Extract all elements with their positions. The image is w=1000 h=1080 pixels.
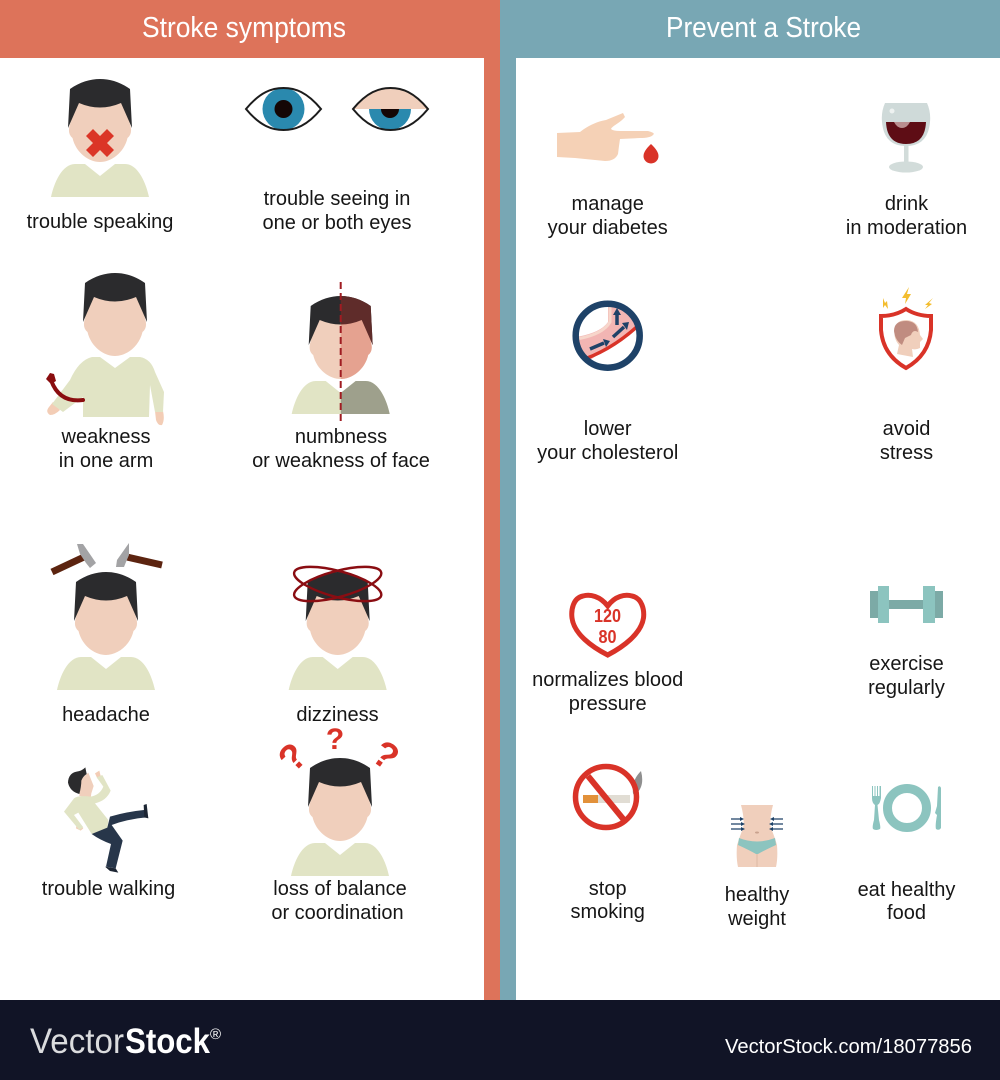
icon: question marks: ? (365, 732, 407, 779)
tip: drink in moderation: in moderation (846, 217, 967, 239)
tip: exercise regularly: exercise (869, 653, 944, 675)
icon: wine glass (882, 103, 930, 172)
tip: manage diabetes (548, 113, 668, 239)
heading: stroke symptoms: Stroke symptoms (142, 12, 346, 44)
symptom: weakness in one arm: weakness (61, 426, 150, 448)
symptom: trouble speaking (27, 79, 173, 233)
tip: avoid stress (880, 287, 933, 464)
panel: prevent a stroke (500, 0, 1000, 1000)
tip: eat healthy food: eat healthy (858, 879, 955, 901)
tip: drink in moderation (846, 103, 967, 239)
tip: healthy weight: healthy (725, 884, 789, 906)
icon: right hammer (116, 543, 162, 567)
tip: lower cholesterol: lower (584, 418, 632, 440)
footer band (0, 1000, 1000, 1080)
symptom: loss of balance: loss of balance (273, 878, 407, 900)
icon: heart with reading: 80 (598, 627, 616, 647)
logo: VectorStock: ® (210, 1026, 221, 1043)
tip: lower cholesterol (537, 300, 678, 464)
tip: normalize blood pressure (532, 595, 683, 715)
icon: dumbbell (870, 586, 943, 623)
icon: red cross over mouth (86, 129, 114, 157)
icon: drooping eye (352, 87, 430, 131)
dashed midline (340, 282, 342, 425)
symptom: trouble walking (42, 767, 175, 900)
tip: normalize blood pressure: normalizes blood (532, 669, 683, 691)
tip: exercise regularly (868, 586, 945, 699)
tip: healthy weight: weight (727, 908, 786, 930)
symptom: numbness of face: numbness (295, 426, 387, 448)
icon: open eye (246, 88, 321, 130)
tip: manage diabetes: your diabetes (548, 217, 668, 239)
symptom: trouble seeing (246, 80, 430, 234)
icon: spinning rings (291, 560, 385, 608)
tip: lower cholesterol: your cholesterol (537, 442, 678, 464)
tip: avoid stress: stress (880, 442, 933, 464)
numb half of face (340, 296, 390, 414)
tip: manage diabetes: manage (572, 193, 644, 215)
icon: shield with head (881, 309, 931, 368)
symptom: dizziness (289, 560, 387, 726)
icon: stumbling man (64, 767, 148, 873)
icon: inward arrows (731, 817, 783, 831)
shirt with arms (52, 357, 164, 417)
icon: question marks: ? (326, 723, 344, 756)
tip: avoid stress: avoid (883, 418, 930, 440)
icon: heart with reading (572, 595, 644, 655)
icon: blood drop (644, 144, 658, 164)
symptom: trouble walking: trouble walking (42, 878, 175, 900)
tip: eat healthy food (858, 786, 955, 924)
hands (47, 402, 164, 425)
tip: healthy weight (725, 805, 789, 930)
icon: no smoking sign (576, 766, 642, 828)
tip: stop smoking: smoking (570, 901, 645, 923)
icon: artery (570, 300, 650, 368)
symptom: trouble speaking: trouble speaking (27, 211, 173, 233)
symptom: loss of balance: or coordination (271, 902, 404, 924)
symptom: headache (52, 543, 162, 726)
logo: VectorStock: Stock (125, 1022, 210, 1061)
logo: VectorStock (30, 1022, 221, 1061)
symptom: headache: headache (62, 704, 150, 726)
symptom: loss of balance (270, 723, 407, 924)
icon: question marks: ? (270, 735, 315, 780)
icon: question marks (270, 723, 407, 780)
icon: plate (888, 788, 926, 828)
symptom: dizziness: dizziness (296, 704, 379, 726)
tip: drink in moderation: drink (885, 193, 929, 215)
tip: eat healthy food: food (887, 902, 926, 924)
panel: stroke symptoms (0, 0, 500, 1000)
arrow: arm drifting (46, 373, 83, 400)
tip: exercise regularly: regularly (868, 677, 945, 699)
icon: fork and knife (872, 786, 941, 830)
symptom: weakness in one arm (46, 273, 164, 472)
icon: heart with reading: 120 (594, 606, 621, 626)
logo: VectorStock: Vector (30, 1022, 124, 1061)
symptom: weakness in one arm: in one arm (59, 450, 153, 472)
symptom: trouble seeing: trouble seeing in (264, 188, 410, 210)
tip: stop smoking: stop (589, 878, 627, 900)
icon: left hammer (52, 544, 96, 572)
tip: stop smoking (570, 766, 645, 923)
icon: pricked finger (557, 113, 654, 161)
symptom: trouble seeing: one or both eyes (262, 212, 412, 234)
heading: prevent a stroke: Prevent a Stroke (666, 12, 861, 44)
icon: slim waist (737, 805, 777, 867)
image id: VectorStock.com/18077856 (725, 1036, 972, 1058)
symptom: numbness of face: or weakness of face (252, 450, 430, 472)
icon: lightning bolts (883, 287, 933, 309)
symptom: numbness of face (252, 282, 430, 472)
tip: normalize blood pressure: pressure (569, 693, 647, 715)
